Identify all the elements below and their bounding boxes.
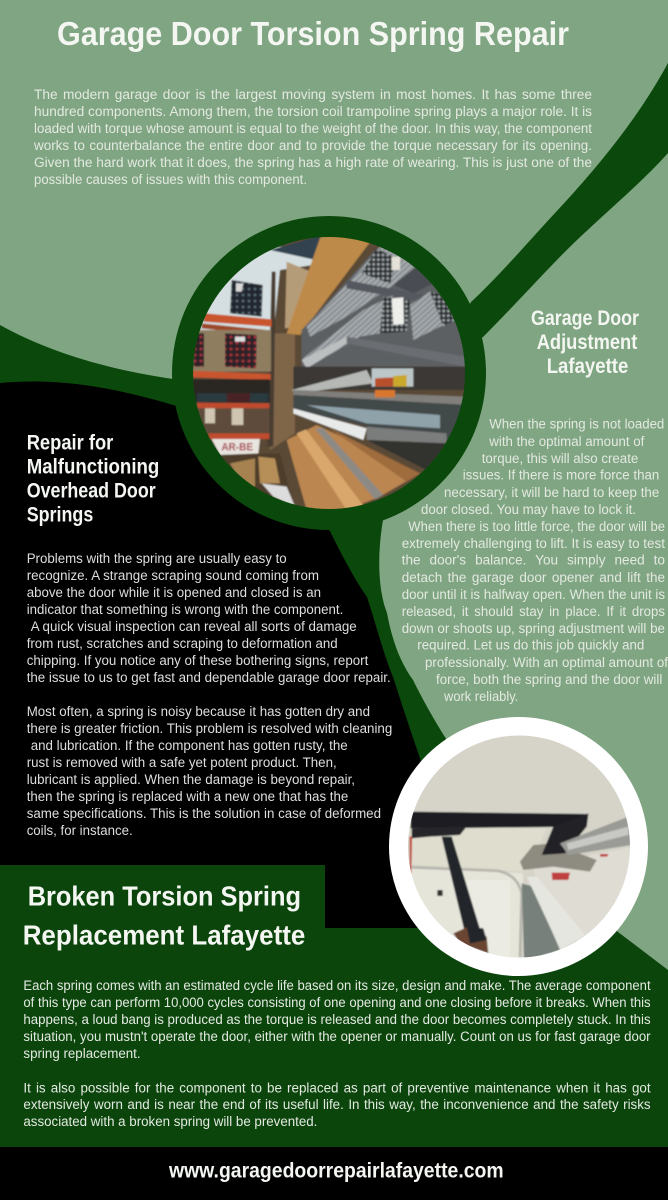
text block: adjustment body: torque, this will also create xyxy=(482,451,638,466)
text block: replacement body: It is also possible for the component to be replaced as part of preventive maintenance when it has got xyxy=(23,1080,651,1096)
text block: noisy spring solutions: then the spring is replaced with a new one that has the xyxy=(27,789,348,804)
text block: introduction: hundred components. Among them, the torsion coil trampoline spring plays a major role. It is xyxy=(34,104,592,119)
heading: broken torsion spring replacement xyxy=(23,881,305,950)
text block: noisy spring solutions: same specifications. This is the solution in case of deformed xyxy=(27,806,381,821)
text block: adjustment body: professionally. With an optimal amount of xyxy=(425,655,668,670)
heading: broken torsion spring replacement: Replacement Lafayette xyxy=(23,919,305,950)
text block: introduction: loaded with torque whose amount is equal to the weight of the door. In this way, the component xyxy=(34,121,592,136)
text block: noisy spring solutions: lubricant is applied. When the damage is beyond repair, xyxy=(27,772,355,787)
heading: repair for malfunctioning overhead door springs: Repair for xyxy=(27,431,113,454)
text block: adjustment body: issues. If there is more force than xyxy=(463,468,659,482)
heading: repair for malfunctioning overhead door springs: Malfunctioning xyxy=(27,455,159,478)
text block: noisy spring solutions: coils, for instance. xyxy=(27,823,133,838)
text block: replacement body: extensively worn and is near the end of its useful life. In this way, the inconvenience and the safety risks xyxy=(23,1097,651,1112)
photo: warehouse shelving in ring xyxy=(172,216,486,530)
text block: noisy spring solutions: and lubrication. If the component has gotten rusty, the xyxy=(31,738,348,753)
text block: adjustment body: required. Let us do this job quickly and xyxy=(417,638,644,652)
text block: adjustment body: the door's balance. You simply need to xyxy=(402,552,665,568)
text block: adjustment body: with the optimal amount of xyxy=(488,434,645,449)
text block: adjustment body: force, both the spring and the door will xyxy=(436,672,662,687)
heading: garage door adjustment xyxy=(531,307,639,378)
text block: adjustment body: When there is too little force, the door will be xyxy=(408,519,665,534)
heading: repair for malfunctioning overhead door springs: Springs xyxy=(27,504,93,527)
text block: adjustment body: released, it should stay in place. If it drops xyxy=(402,604,665,619)
text block: spring problems: chipping. If you notice any of these bothering signs, report xyxy=(27,653,369,668)
text block: spring problems xyxy=(27,551,391,685)
heading: garage door adjustment: Garage Door xyxy=(531,307,639,330)
photo: warehouse shelving in ring: AR-BE xyxy=(221,442,253,454)
panel: footer xyxy=(0,1147,668,1200)
panel: black repair section xyxy=(0,381,424,928)
text block: replacement body: Each spring comes with an estimated cycle life based on its size, design and make. The average component xyxy=(23,978,651,993)
text block: replacement body: of this type can perform 10,000 cycles consisting of one opening and one closing before it breaks. When this xyxy=(23,995,651,1010)
text block: adjustment body: down or shoots up, spring adjustment will be xyxy=(402,621,665,636)
text block: replacement body: happens, a loud bang is produced as the torque is released and the door becomes completely stuck. In this xyxy=(23,1012,651,1027)
heading: garage door adjustment: Adjustment xyxy=(537,331,637,354)
text block: introduction: The modern garage door is the largest moving system in most homes. It has some three xyxy=(34,87,592,102)
text block: replacement body: associated with a broken spring will be prevented. xyxy=(23,1114,317,1129)
text block: introduction: possible causes of issues with this component. xyxy=(34,172,307,187)
text block: spring problems: recognize. A strange scraping sound coming from xyxy=(27,568,319,583)
dark green ribbon left xyxy=(0,325,240,470)
heading: broken torsion spring replacement: Broken Torsion Spring xyxy=(28,881,301,912)
text block: noisy spring solutions: rust is removed with a safe yet potent product. Then, xyxy=(27,755,337,770)
text block: noisy spring solutions: there is greater friction. This problem is resolved with cleaning xyxy=(27,721,392,736)
text block: adjustment body: extremely challenging to lift. It is easy to test xyxy=(402,536,665,551)
text block: spring problems: the issue to us to get fast and dependable garage door repair. xyxy=(27,670,391,685)
footer website address: www.garagedoorrepairlafayette.com xyxy=(168,1160,504,1182)
text block: replacement body: spring replacement. xyxy=(23,1046,141,1061)
text block: introduction xyxy=(33,87,592,187)
text block: adjustment body: necessary, it will be hard to keep the xyxy=(444,485,659,500)
heading: repair for malfunctioning overhead door springs xyxy=(27,431,159,527)
text block: adjustment body: When the spring is not loaded xyxy=(489,416,664,432)
dark green ribbon below circle xyxy=(320,493,450,780)
heading: repair for malfunctioning overhead door springs: Overhead Door xyxy=(27,480,156,503)
text block: adjustment body: work reliably. xyxy=(443,689,518,704)
heading: garage door adjustment: Lafayette xyxy=(547,355,628,378)
title: Garage Door Torsion Spring Repair xyxy=(57,16,569,53)
text block: adjustment body: detach the garage door opener and lift the xyxy=(402,570,665,585)
text block: spring problems: from rust, scratches and scraping to deformation and xyxy=(27,636,338,651)
text block: spring problems: Problems with the spring are usually easy to xyxy=(27,551,287,566)
dark green ribbon top right xyxy=(440,63,668,360)
text block: adjustment body: door closed. You may have to lock it. xyxy=(421,502,636,517)
text block: replacement body: situation, you mustn't operate the door, either with the opener or manually. Count on us for fast garage door xyxy=(23,1029,651,1044)
text block: spring problems: A quick visual inspection can reveal all sorts of damage xyxy=(31,619,357,634)
text block: introduction: works to counterbalance the entire door and to provide the torque necessary for its opening. xyxy=(33,138,592,153)
text block: spring problems: indicator that something is wrong with the component. xyxy=(27,602,343,617)
text block: noisy spring solutions xyxy=(27,704,392,838)
text block: adjustment body xyxy=(402,416,668,704)
text block: replacement body xyxy=(23,978,651,1129)
text block: adjustment body: door until it is halfway open. When the unit is xyxy=(402,587,665,602)
photo: torsion spring and opener rail in white ring xyxy=(389,717,648,976)
panel: dark green replacement section xyxy=(0,865,668,1147)
text block: noisy spring solutions: Most often, a spring is noisy because it has gotten dry and xyxy=(27,704,370,719)
text block: spring problems: above the door while it is opened and closed is an xyxy=(27,585,321,600)
text block: introduction: Given the hard work that it does, the spring has a high rate of wearing. This is just one of the xyxy=(34,155,592,170)
